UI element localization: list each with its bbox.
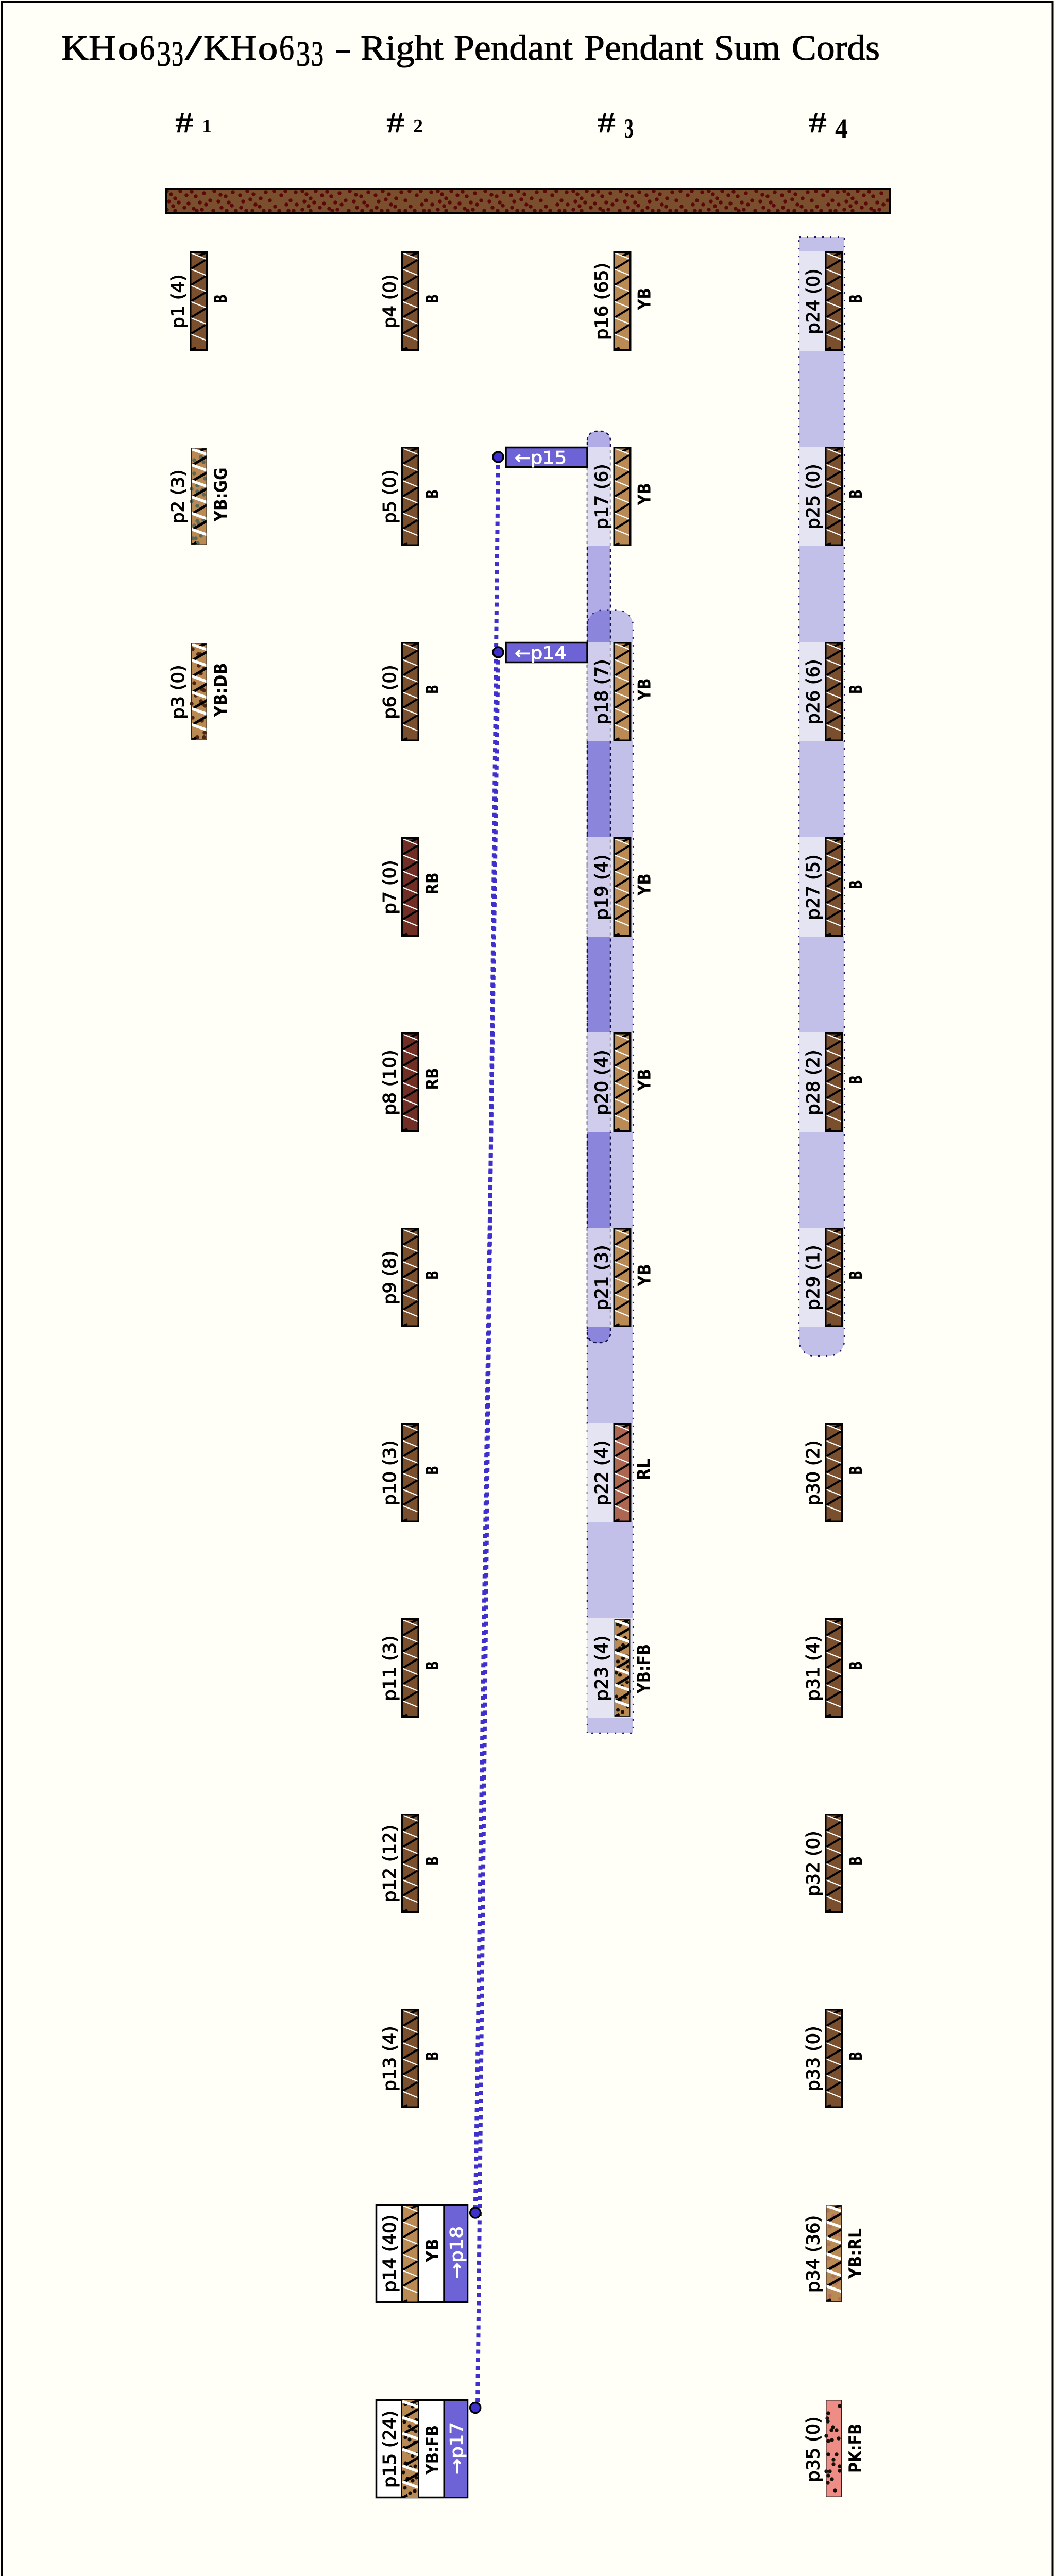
pendant p1: B [211, 294, 231, 303]
pendant p6: B [422, 685, 443, 694]
pendant p2 [168, 448, 231, 545]
pendant p32: B [846, 1856, 866, 1866]
pendant p34: p34 (36) [803, 2215, 824, 2293]
pendant p35: PK:FB [845, 2424, 866, 2473]
pendant p30: B [846, 1466, 866, 1475]
pendant p8 [380, 1033, 443, 1131]
title: – [336, 28, 350, 68]
group band: column 4 p24 to p29 [799, 237, 844, 1356]
pendant p2: YB:GG [211, 468, 231, 522]
pendant p24 [803, 252, 866, 350]
title: 6 [140, 28, 155, 68]
pendant p31 [803, 1619, 866, 1717]
pendant p18: p18 (7) [591, 659, 612, 724]
pendant p7: RB [422, 873, 443, 894]
pendant p12: B [422, 1856, 443, 1866]
pendant p18 [591, 642, 655, 741]
pendant p15 boxed, links to p17 [376, 2400, 481, 2498]
column heading 1 [175, 106, 212, 139]
column heading 3: 3 [624, 113, 634, 144]
pendant p13 [380, 2009, 443, 2108]
pendant p16 [591, 252, 655, 350]
link tag: from p15: ←p15 [515, 448, 567, 468]
title: 0 [258, 38, 278, 65]
pendant p12: p12 (12) [380, 1825, 400, 1902]
title: 3 [172, 35, 183, 74]
title: KH [61, 28, 116, 68]
pendant p1: p1 (4) [168, 274, 189, 329]
pendant p2: p2 (3) [168, 470, 189, 523]
pendant p31: p31 (4) [803, 1636, 824, 1701]
pendant p22: RL [634, 1458, 654, 1481]
pendant p5: B [422, 489, 443, 499]
pendant p21: YB [635, 1264, 655, 1286]
pendant p22 [591, 1423, 654, 1522]
title: 3 [157, 35, 171, 74]
pendant p17: YB [635, 483, 655, 505]
pendant p6 [380, 642, 443, 741]
pendant p35 [803, 2400, 866, 2497]
pendant p31: B [846, 1661, 866, 1670]
pendant p15 boxed, links to p17: p15 (24) [380, 2411, 400, 2488]
column heading 2 [386, 106, 423, 139]
column heading 1: # [175, 106, 193, 139]
pendant p28: B [846, 1075, 866, 1084]
column heading 1: 1 [202, 115, 212, 137]
pendant p18: YB [635, 678, 655, 701]
pendant p32: p32 (0) [803, 1831, 824, 1896]
pendant p19 [591, 838, 655, 936]
pendant p20: p20 (4) [591, 1050, 612, 1115]
pendant p11: B [422, 1661, 443, 1670]
title: Pendant [454, 28, 573, 68]
pendant p8: p8 (10) [380, 1050, 400, 1115]
pendant p8: RB [422, 1067, 443, 1090]
pendant p33: B [846, 2052, 866, 2061]
pendant p17: p17 (6) [591, 464, 612, 529]
pendant p30: p30 (2) [803, 1440, 824, 1505]
pendant p23: YB:FB [634, 1644, 654, 1694]
title: 3 [296, 35, 310, 74]
column heading 3 [598, 106, 634, 144]
pendant p34: YB:RL [845, 2228, 866, 2279]
column heading 4: 4 [835, 113, 848, 144]
pendant p25 [803, 447, 866, 546]
pendant p32 [803, 1814, 866, 1912]
pendant p3 [168, 643, 231, 740]
pendant p5: p5 (0) [380, 470, 400, 523]
pendant p11 [380, 1619, 443, 1717]
pendant p33 [803, 2009, 866, 2108]
pendant p27: p27 (5) [803, 855, 824, 920]
group band: column 3 p18 to p23 [587, 610, 633, 1733]
main cord bar [166, 189, 890, 213]
pendant p30 [803, 1423, 866, 1522]
pendant p25: B [846, 489, 866, 499]
column heading 4: # [809, 106, 827, 139]
link tag: from p14: ←p14 [515, 643, 567, 664]
pendant p24: p24 (0) [803, 269, 824, 334]
pendant p14 boxed, links to p18: p14 (40) [380, 2215, 400, 2292]
pendant p10: B [422, 1466, 443, 1475]
pendant p21: p21 (3) [591, 1245, 612, 1310]
title: Pendant [584, 28, 704, 68]
link tag: from p14 [493, 643, 587, 664]
pendant p10 [380, 1423, 443, 1522]
column heading 2: # [386, 106, 404, 139]
pendant p29: p29 (1) [803, 1245, 824, 1310]
pendant p15 boxed, links to p17: →p17 [447, 2422, 467, 2475]
title: 3 [311, 35, 324, 74]
label highlight rows: column 4 [799, 251, 844, 1327]
pendant p19: YB [635, 873, 655, 896]
pendant p3: YB:DB [211, 663, 231, 717]
pendant p12 [380, 1814, 443, 1912]
pendant p14 boxed, links to p18: YB [422, 2239, 443, 2263]
pendant p7 [380, 838, 443, 936]
pendant p29 [803, 1228, 866, 1327]
pendant p14 boxed, links to p18: →p18 [447, 2226, 467, 2279]
title: Cords [792, 28, 880, 68]
pendant p27 [803, 838, 866, 936]
pendant p22: p22 (4) [591, 1440, 612, 1505]
pendant p34 [803, 2205, 866, 2302]
pendant p21 [591, 1228, 655, 1327]
pendant p10: p10 (3) [380, 1440, 400, 1505]
pendant p25: p25 (0) [803, 464, 824, 529]
link tag: from p15 [493, 447, 587, 468]
pendant p4: p4 (0) [380, 274, 400, 329]
title [61, 28, 880, 74]
pendant p9: p9 (8) [380, 1251, 400, 1304]
pendant p26 [803, 642, 866, 741]
pendant p1 [168, 252, 231, 350]
pendant p4: B [422, 294, 443, 303]
title: 0 [118, 38, 138, 65]
pendant p24: B [846, 294, 866, 303]
pendant p23: p23 (4) [591, 1636, 612, 1701]
pendant p27: B [846, 880, 866, 889]
pendant p7: p7 (0) [380, 860, 400, 914]
pendant p20 [591, 1033, 655, 1131]
pendant p16: p16 (65) [591, 263, 612, 340]
pendant p16: YB [635, 287, 655, 310]
pendant p9 [380, 1228, 443, 1327]
pendant p23 [591, 1619, 654, 1717]
group band: column 3 p17 to p21 [587, 431, 610, 1343]
column heading 4 [809, 106, 848, 144]
pendant p26: B [846, 685, 866, 694]
title: 6 [279, 28, 294, 68]
column heading 2: 2 [413, 115, 423, 137]
pendant p9: B [422, 1270, 443, 1280]
pendant p29: B [846, 1270, 866, 1280]
pendant p13: p13 (4) [380, 2026, 400, 2091]
title: KH [203, 28, 257, 68]
title: Sum [714, 28, 780, 68]
pendant p13: B [422, 2052, 443, 2061]
pendant p11: p11 (3) [380, 1636, 400, 1701]
pendant p26: p26 (6) [803, 659, 824, 724]
pendant p3: p3 (0) [168, 665, 189, 719]
pendant p17 [591, 447, 655, 546]
pendant p28 [803, 1033, 866, 1131]
pendant p28: p28 (2) [803, 1050, 824, 1115]
pendant p14 boxed, links to p18 [376, 2205, 481, 2303]
pendant p15 boxed, links to p17: YB:FB [422, 2425, 443, 2475]
column heading 3: # [598, 106, 616, 139]
title: / [185, 28, 202, 68]
pendant p20: YB [635, 1069, 655, 1091]
pendant p6: p6 (0) [380, 665, 400, 719]
pendant p33: p33 (0) [803, 2026, 824, 2091]
pendant p5 [380, 447, 443, 546]
pendant p35: p35 (0) [803, 2417, 824, 2482]
connector: p14 to p18 [475, 652, 498, 2213]
connector: p15 to p17 [478, 457, 498, 2408]
label highlight rows: column 3 [587, 447, 633, 1718]
pendant p19: p19 (4) [591, 855, 612, 920]
title: Right [361, 28, 444, 68]
pendant p4 [380, 252, 443, 350]
